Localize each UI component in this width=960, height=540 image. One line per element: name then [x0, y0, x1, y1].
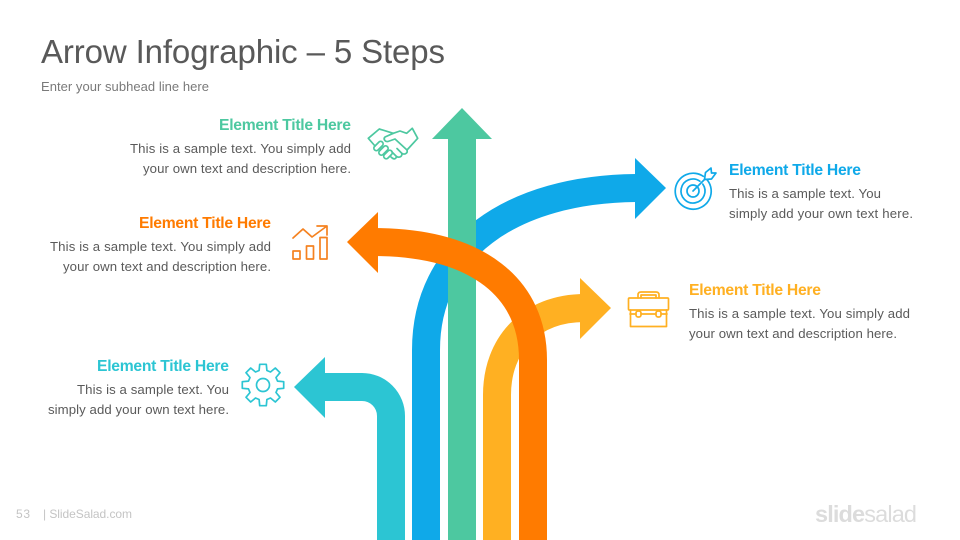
step: orange text: This is a sample text. You simply add	[50, 239, 271, 254]
subhead: Enter your subhead line here	[41, 79, 209, 94]
step: orange text	[50, 215, 271, 274]
logo: slidesalad: slidesalad	[815, 501, 917, 527]
arrow: teal	[294, 357, 391, 540]
arrow: yellow	[497, 278, 611, 540]
footer: page number: 53	[16, 507, 30, 521]
step: blue text	[729, 162, 913, 221]
step: blue text: Element Title Here	[729, 162, 861, 179]
step: yellow text	[689, 282, 910, 341]
step: green text: Element Title Here	[219, 117, 351, 134]
footer: site name: | SlideSalad.com	[43, 507, 132, 521]
step: yellow text: This is a sample text. You simply add	[689, 306, 910, 321]
icon: growth chart	[293, 226, 327, 259]
step: teal text: This is a sample text. You	[77, 382, 229, 397]
step: green text	[130, 117, 351, 176]
step: yellow text: your own text and description here.	[689, 326, 897, 341]
step: teal text	[48, 358, 229, 417]
icon: gear	[242, 364, 284, 406]
step: blue text: simply add your own text here.	[729, 206, 913, 221]
step: orange text: your own text and description here.	[63, 259, 271, 274]
icon: handshake	[368, 128, 418, 160]
icon: target	[675, 168, 716, 209]
step: green text: your own text and description here.	[143, 161, 351, 176]
arrow: green	[432, 108, 492, 540]
arrow: blue	[426, 158, 666, 540]
arrows diagram	[294, 108, 666, 540]
title: Arrow Infographic – 5 Steps	[41, 33, 445, 70]
arrow: orange	[347, 212, 533, 540]
step: orange text: Element Title Here	[139, 215, 271, 232]
step: blue text: This is a sample text. You	[729, 186, 881, 201]
step: green text: This is a sample text. You simply add	[130, 141, 351, 156]
step: teal text: Element Title Here	[97, 358, 229, 375]
icon: briefcase	[628, 292, 668, 326]
step: teal text: simply add your own text here.	[48, 402, 229, 417]
step: yellow text: Element Title Here	[689, 282, 821, 299]
